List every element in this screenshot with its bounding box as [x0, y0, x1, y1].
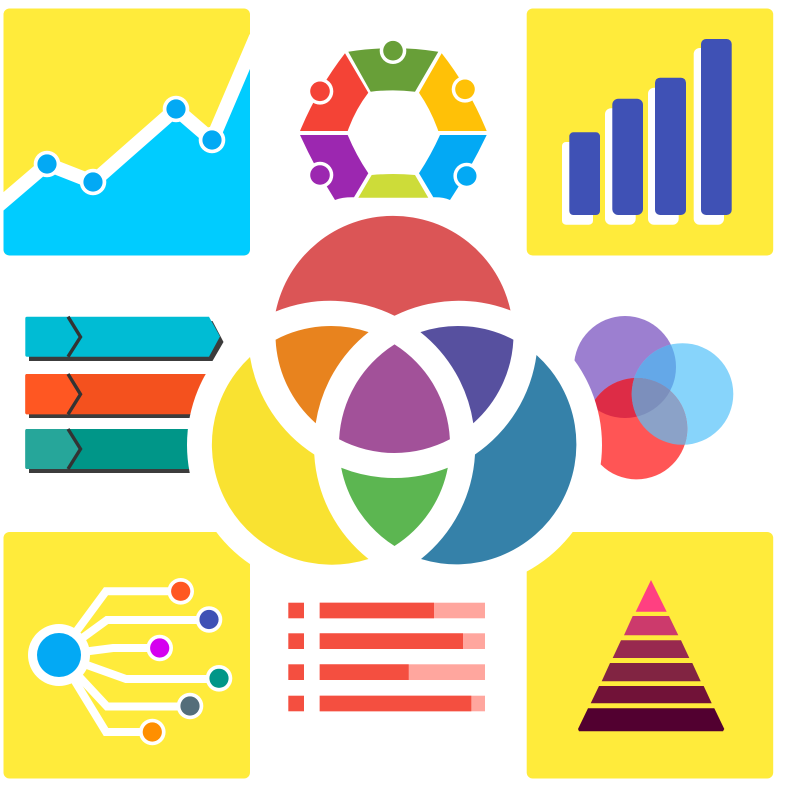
- row 4: [288, 696, 485, 711]
- pyramid tiers: [578, 580, 724, 731]
- segment: purple lower left: [300, 135, 368, 200]
- panel background: [4, 532, 250, 778]
- blue bars: [569, 39, 732, 215]
- panel: pyramid: [527, 532, 773, 778]
- large central venn diagram: [212, 216, 576, 565]
- area fill: [4, 69, 250, 256]
- circle: light blue: [632, 343, 733, 445]
- circle: purple: [574, 316, 676, 418]
- segment: purple centre: [339, 344, 450, 453]
- segment: blue right: [421, 355, 576, 564]
- panel: line and area chart: [0, 8, 256, 260]
- panel background: [4, 8, 250, 256]
- hexagon cycle diagram: [300, 37, 487, 200]
- branch nodes: [139, 578, 232, 745]
- row 1: [288, 603, 485, 618]
- segment: indigo overlap: [420, 326, 513, 423]
- bar: teal: [25, 429, 230, 473]
- row 3: [288, 664, 485, 680]
- segment: amber upper right: [419, 53, 487, 131]
- overlap: purple and blue: [634, 344, 676, 391]
- segment: orange overlap: [276, 326, 369, 423]
- panel background: [527, 532, 773, 778]
- small three-circle venn: [574, 316, 733, 479]
- panel background: [527, 8, 773, 256]
- segment: red upper left: [300, 53, 368, 131]
- progress bar list: [288, 603, 485, 711]
- segment: blue lower right: [419, 135, 487, 200]
- bar: orange: [25, 374, 230, 418]
- panel: node diagram: [4, 532, 250, 778]
- segment: red top: [276, 216, 510, 316]
- connector lines: [59, 591, 219, 732]
- white halo around central venn: [187, 190, 602, 589]
- overlap: purple and red: [594, 378, 670, 418]
- segment: yellow left: [212, 357, 368, 565]
- panel: bar chart: [527, 8, 773, 256]
- bar: cyan: [25, 317, 223, 361]
- chevron list: three arrow bars: [25, 317, 230, 473]
- overlap: all three: [632, 378, 670, 416]
- segment: green overlap: [341, 468, 448, 546]
- segment: green top: [348, 48, 438, 92]
- white trend line: [0, 37, 256, 206]
- data points: [34, 96, 225, 195]
- circle: red: [586, 378, 687, 479]
- white bar shadows: [562, 48, 724, 225]
- overlap: red and blue: [632, 378, 688, 445]
- node rings and dots: [307, 37, 480, 189]
- segment: lime bottom: [358, 174, 428, 198]
- hub: [28, 624, 90, 686]
- row 2: [288, 633, 485, 649]
